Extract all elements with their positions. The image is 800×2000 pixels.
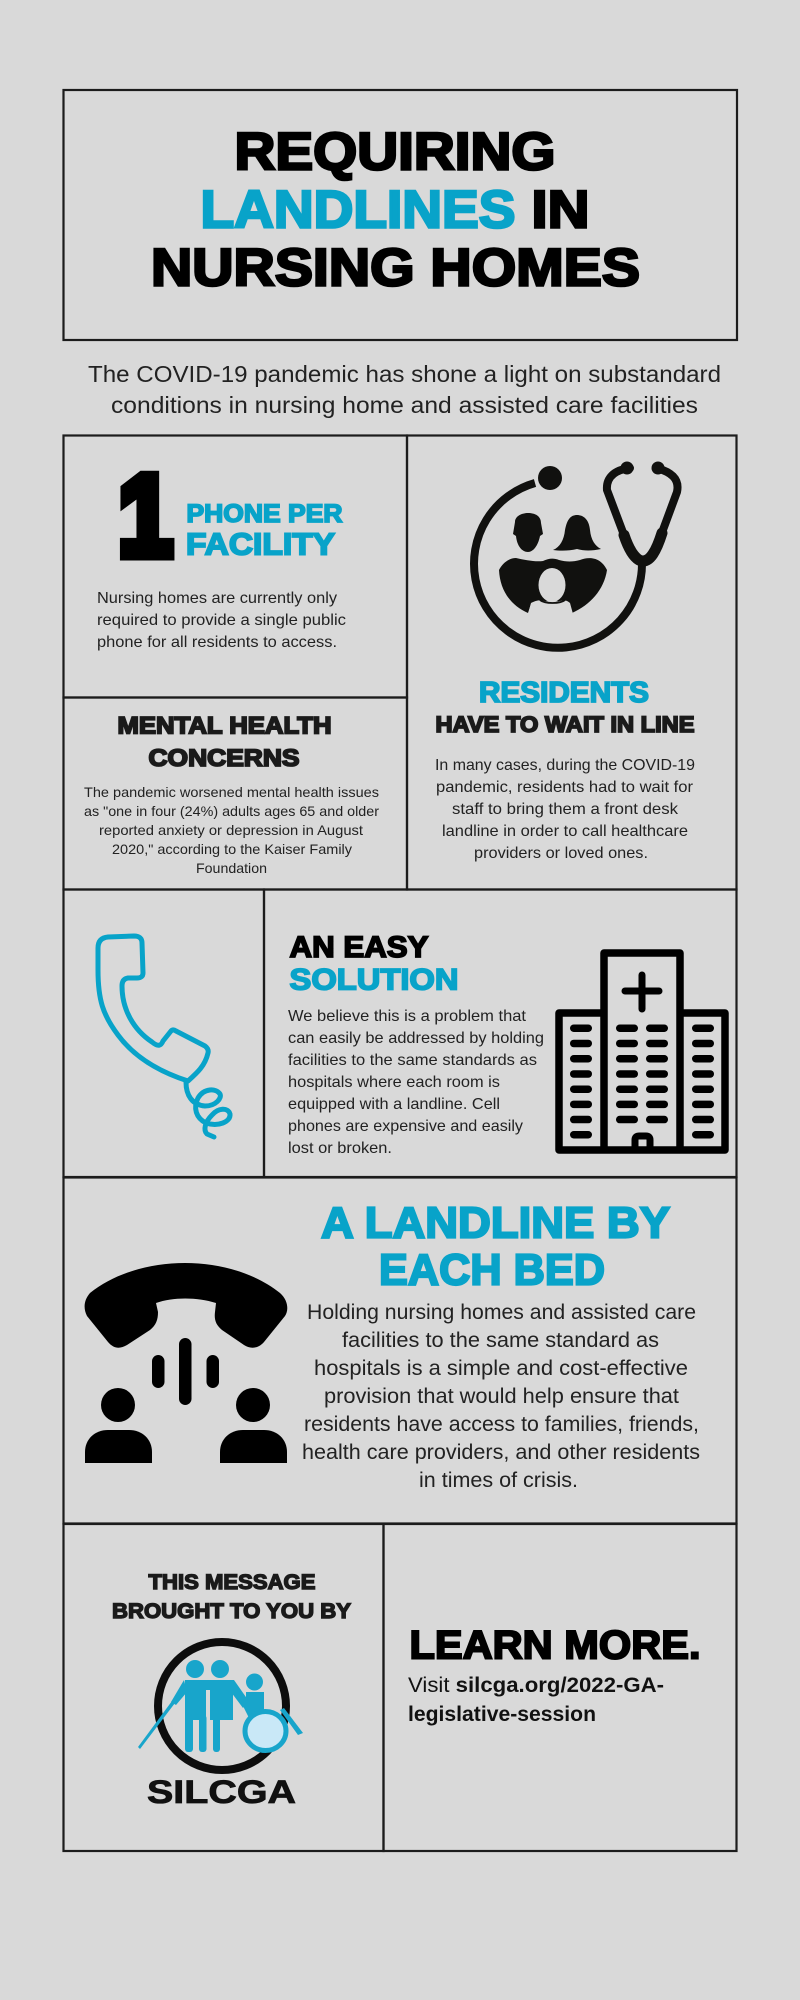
link text	[408, 1674, 664, 1726]
body text: We believe this is a problem that	[288, 1008, 527, 1025]
icon: blue telephone handset	[98, 936, 230, 1137]
body text	[302, 1301, 700, 1492]
body text: phone for all residents to access.	[97, 634, 337, 651]
heading: this message brought to you by: THIS MESSAGE	[148, 1571, 316, 1594]
body text: Holding nursing homes and assisted care	[307, 1301, 696, 1324]
panel: an easy solution	[264, 890, 736, 1177]
body text: provision that would help ensure that	[324, 1385, 679, 1408]
body text	[97, 590, 346, 651]
body text: lost or broken.	[288, 1140, 392, 1157]
heading: mental health concerns	[118, 712, 332, 772]
logo: SILCGA: SILCGA	[147, 1774, 296, 1810]
heading: a landline by each bed: A LANDLINE BY	[321, 1198, 670, 1248]
heading: this message brought to you by	[112, 1571, 351, 1623]
body text: health care providers, and other residents	[302, 1441, 700, 1464]
link text: Visit silcga.org/2022-GA-	[408, 1674, 664, 1697]
heading: phone per facility: PHONE PER	[186, 500, 342, 528]
heading: learn more: LEARN MORE.	[410, 1624, 700, 1668]
body text: residents have access to families, friends,	[304, 1413, 699, 1436]
heading: have to wait in line: HAVE TO WAIT IN LINE	[436, 712, 694, 737]
body text: facilities to the same standard as	[342, 1329, 659, 1352]
panel: learn more	[384, 1524, 736, 1851]
body text: required to provide a single public	[97, 612, 346, 629]
panel: telephone icon	[64, 890, 264, 1177]
body text: staff to bring them a front desk	[452, 801, 679, 818]
icon: family in stethoscope	[474, 462, 678, 648]
subtitle: conditions in nursing home and assisted care facilities	[111, 392, 698, 418]
body text: Foundation	[196, 860, 267, 876]
title: LANDLINES	[200, 180, 516, 240]
title: NURSING HOMES	[151, 238, 640, 298]
panel: one phone per facility	[64, 436, 407, 698]
title: REQUIRING	[234, 122, 556, 182]
body text: phones are expensive and easily	[288, 1118, 523, 1135]
heading: an easy solution: SOLUTION	[290, 964, 458, 996]
body text: reported anxiety or depression in August	[99, 822, 363, 838]
heading: a landline by each bed: EACH BED	[379, 1246, 605, 1294]
subtitle	[88, 361, 721, 418]
panel: mental health concerns	[64, 698, 407, 890]
panel: title	[64, 90, 737, 340]
title: IN	[532, 180, 590, 240]
panel: residents wait in line	[407, 436, 736, 890]
icon: handset and two people talking	[85, 1263, 287, 1463]
body text: hospitals where each room is	[288, 1074, 500, 1091]
heading: an easy solution: AN EASY	[290, 931, 428, 964]
big number 1: 1	[118, 453, 172, 580]
heading: an easy solution	[290, 931, 458, 996]
body text: In many cases, during the COVID-19	[435, 757, 695, 774]
logo: SILCGA	[138, 1642, 303, 1810]
heading: a landline by each bed	[321, 1198, 670, 1294]
link text: legislative-session	[408, 1703, 596, 1726]
heading: this message brought to you by: BROUGHT TO YOU BY	[112, 1600, 351, 1623]
body text: 2020," according to the Kaiser Family	[112, 841, 352, 857]
body text: can easily be addressed by holding	[288, 1030, 544, 1047]
body text: providers or loved ones.	[474, 845, 648, 862]
body text: equipped with a landline. Cell	[288, 1096, 500, 1113]
body text: in times of crisis.	[419, 1469, 578, 1492]
icon: hospital building	[559, 953, 725, 1150]
body text	[84, 784, 379, 876]
panel: sponsor	[64, 1524, 384, 1851]
body text: pandemic, residents had to wait for	[436, 779, 694, 796]
body text: facilities to the same standards as	[288, 1052, 537, 1069]
heading: residents: RESIDENTS	[479, 677, 649, 709]
panel: a landline by each bed	[64, 1178, 736, 1524]
body text: landline in order to call healthcare	[442, 823, 688, 840]
subtitle: The COVID-19 pandemic has shone a light on substandard	[88, 361, 721, 387]
heading: phone per facility	[186, 500, 342, 562]
body text	[288, 1008, 544, 1157]
heading: mental health concerns: CONCERNS	[148, 745, 300, 772]
heading: phone per facility: FACILITY	[186, 526, 335, 562]
title	[151, 122, 640, 298]
body text: hospitals is a simple and cost-effective	[314, 1357, 688, 1380]
heading: mental health concerns: MENTAL HEALTH	[118, 712, 332, 740]
body text	[435, 757, 695, 862]
body text: The pandemic worsened mental health issues	[84, 784, 379, 800]
body text: as "one in four (24%) adults ages 65 and older	[84, 803, 379, 819]
body text: Nursing homes are currently only	[97, 590, 337, 607]
